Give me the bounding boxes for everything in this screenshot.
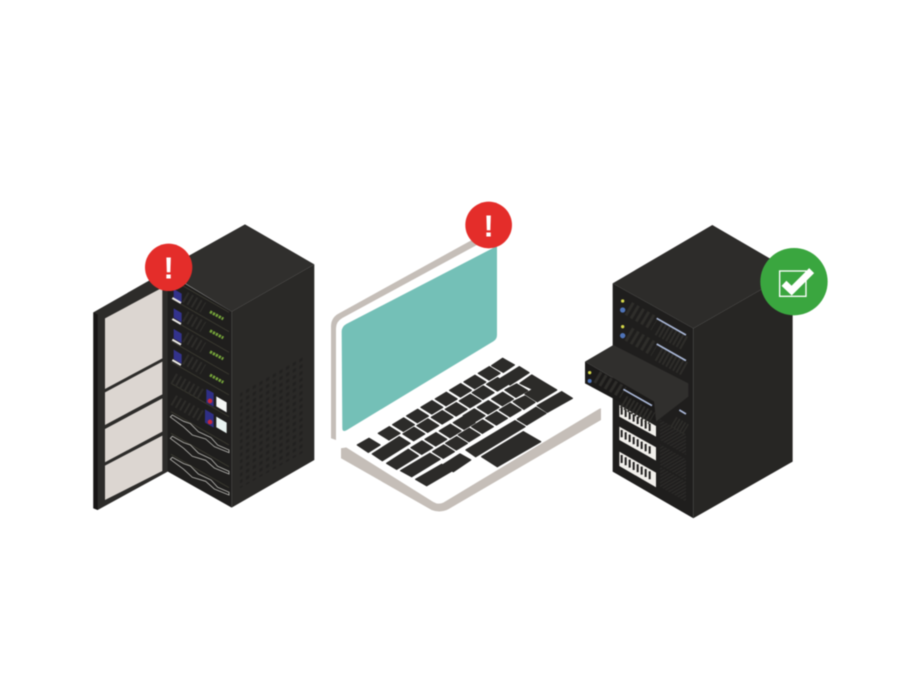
- wavy panel outlines: [170, 415, 229, 495]
- left server rack with open door: [93, 224, 314, 510]
- laptop: [331, 202, 602, 511]
- open door frame: [93, 270, 168, 510]
- keyboard keys: [357, 358, 572, 486]
- rack top face: [613, 225, 793, 328]
- upper server units: [620, 299, 686, 502]
- base top white: [337, 345, 602, 504]
- rack side face: [232, 264, 314, 508]
- teal screen: [342, 246, 497, 431]
- checkbox: [780, 271, 806, 296]
- alert badge: !: [484, 209, 494, 243]
- home row: [387, 375, 557, 469]
- function row: [378, 358, 514, 440]
- trackpad: [482, 432, 541, 467]
- alert badge: [145, 244, 192, 291]
- drawer top: [585, 345, 688, 422]
- door glass panels: [105, 288, 162, 500]
- blue status lights: [172, 289, 182, 365]
- red and white drive modules: [205, 389, 227, 433]
- rack top face: [163, 224, 314, 312]
- shift row: [401, 392, 572, 477]
- alert badge: !: [164, 252, 174, 286]
- rack front face: [613, 283, 693, 518]
- alert badge: [465, 202, 512, 248]
- rack units: [171, 279, 229, 488]
- white comb drive bays: [619, 405, 656, 487]
- door frame shadow edge: [93, 312, 98, 510]
- side vent pattern: [240, 355, 305, 488]
- lid outer rim: [331, 237, 502, 443]
- ok badge: [760, 248, 828, 315]
- space row: [416, 407, 546, 486]
- lid white bezel: [336, 233, 502, 447]
- green status bars: [210, 312, 223, 382]
- drawer front: [585, 362, 656, 422]
- check mark: [784, 271, 812, 291]
- pulled-out drawer: [585, 345, 688, 422]
- small corner key: [357, 438, 380, 452]
- base bottom edge: [341, 408, 601, 511]
- rack front face: [165, 272, 232, 508]
- rack side face: [693, 272, 793, 518]
- number row: [372, 367, 529, 461]
- right server rack with pulled-out drawer: [585, 225, 828, 518]
